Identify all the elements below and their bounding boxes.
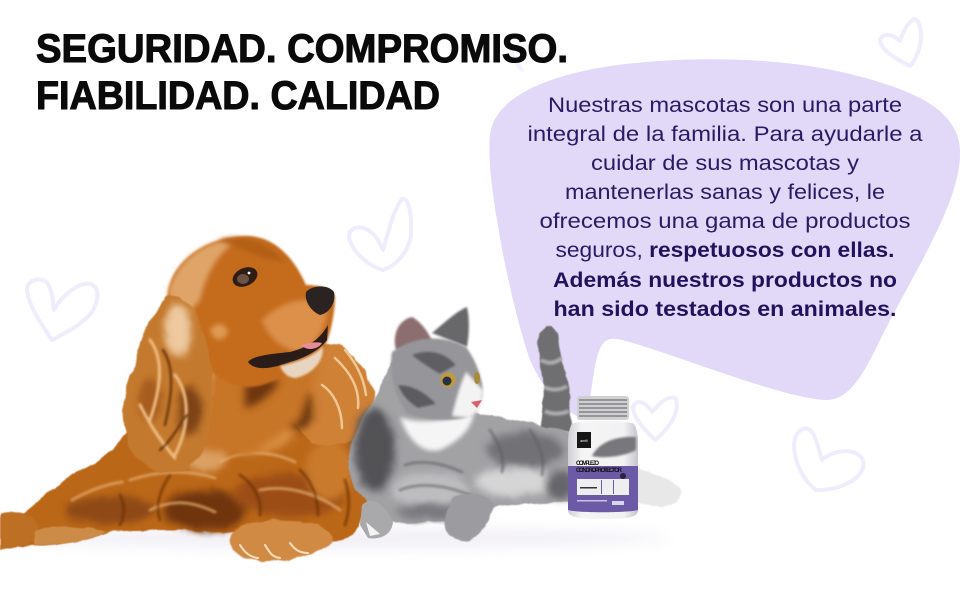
bottle body — [568, 421, 638, 519]
cat front paw — [444, 494, 493, 540]
bottle label: COMPLEJO — [576, 461, 599, 467]
bottle label: anéli — [580, 439, 588, 443]
dog body — [20, 385, 368, 547]
dog chin — [280, 346, 323, 378]
cat body — [348, 360, 600, 523]
dog neck — [200, 360, 320, 455]
cat — [348, 307, 681, 540]
cat stripes — [400, 430, 543, 495]
dog fur strokes — [72, 453, 349, 525]
cat hind leg — [625, 468, 681, 506]
bottle label — [568, 432, 638, 512]
bubble text: Además nuestros productos no — [553, 269, 897, 292]
product bottle — [568, 396, 638, 519]
cat ears — [395, 307, 469, 350]
heading — [36, 27, 568, 118]
decorative hearts — [27, 19, 921, 490]
bubble text: cuidar de sus mascotas y — [591, 152, 860, 175]
cat head — [391, 339, 483, 420]
bottle label: CONDROPROTECTOR — [576, 468, 623, 474]
cat chest — [400, 412, 473, 451]
bubble text: integral de la familia. Para ayudarle a — [528, 123, 923, 146]
bubble text: Nuestras mascotas son una parte — [548, 94, 902, 117]
heading: FIABILIDAD. CALIDAD — [36, 74, 440, 118]
heading: SEGURIDAD. COMPROMISO. — [36, 27, 568, 71]
floor shadow — [10, 528, 670, 548]
dog — [0, 236, 375, 561]
dog nose — [306, 286, 334, 315]
bottle cap — [577, 396, 629, 420]
dog front paw — [230, 520, 333, 561]
speech bubble — [489, 59, 960, 420]
dog ear — [123, 297, 213, 472]
cat eyes — [440, 372, 480, 388]
bubble text: seguros, respetuosos con ellas. — [556, 239, 894, 262]
dog ruff (right ear) — [286, 344, 375, 445]
cat paw against dog — [360, 501, 393, 538]
dog tongue — [301, 342, 322, 349]
bubble text — [528, 94, 923, 321]
dog mouth — [248, 325, 328, 368]
cat tail — [538, 327, 571, 432]
cat nose — [471, 400, 482, 408]
bubble text: mantenerlas sanas y felices, le — [565, 181, 885, 204]
bubble text: ofrecemos una gama de productos — [540, 210, 910, 233]
bubble text: han sido testados en animales. — [554, 298, 896, 321]
dog left paw — [0, 511, 106, 549]
dog head — [167, 236, 335, 387]
dog eye — [229, 263, 261, 291]
